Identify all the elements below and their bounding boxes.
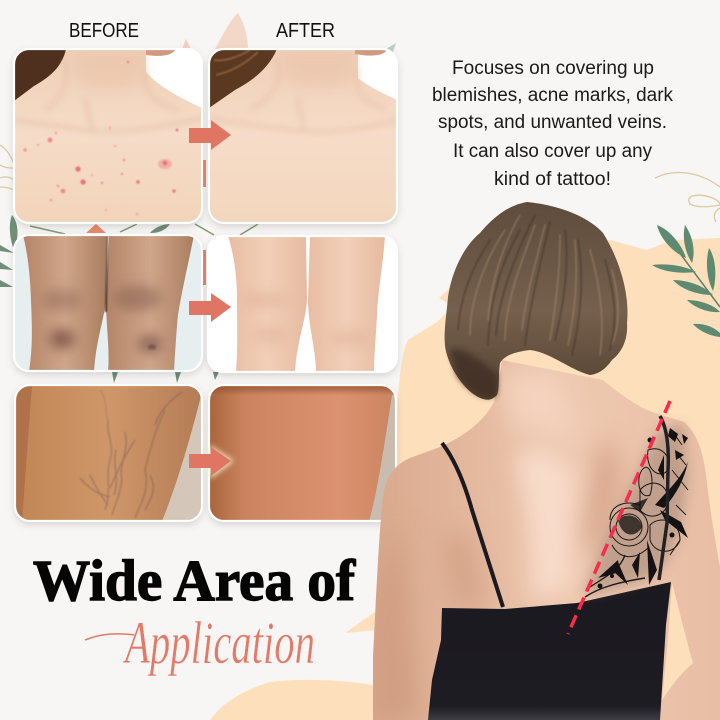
- neck and collarbone shading: [14, 60, 202, 132]
- title: Application script: [85, 610, 315, 676]
- body: [370, 340, 720, 720]
- panel: after, clear chest: [209, 49, 397, 223]
- acne spots: [23, 61, 178, 215]
- text block: description: It can also cover up any: [453, 141, 652, 162]
- arrow: row 1: [189, 120, 231, 150]
- title: Application script: Application: [122, 610, 315, 676]
- panel: after, clear knees: [208, 236, 397, 372]
- heading: after label: AFTER: [276, 20, 335, 42]
- panel: before, chest acne: [14, 49, 202, 223]
- heading: before label: BEFORE: [69, 20, 139, 42]
- dark knee patches: [42, 285, 162, 353]
- decorative leaves behind panels: [0, 13, 396, 383]
- gap between dress and right arm: [662, 583, 693, 700]
- text block: description: kind of tattoo!: [494, 169, 611, 190]
- panel: before, spider veins: [15, 385, 204, 521]
- left strap: [442, 443, 503, 607]
- title: Wide Area of: Wide Area of: [33, 548, 356, 613]
- arrow: row 3 with glow: [189, 447, 231, 476]
- green branch, top right: [652, 225, 720, 337]
- text block: description: blemishes, acne marks, dark: [432, 85, 673, 106]
- right leg: [106, 235, 194, 372]
- right strap: [659, 416, 668, 580]
- decorative gold outline leaves, top right: [655, 172, 720, 222]
- panel: after, smooth leg: [209, 383, 398, 521]
- arrow: row 2: [189, 293, 231, 322]
- text block: description: spots, and unwanted veins.: [438, 112, 667, 133]
- dress: [428, 582, 671, 720]
- text block: description: [432, 58, 673, 190]
- white background top right: [146, 49, 202, 108]
- peach background blob: [210, 238, 720, 720]
- hair: [14, 49, 66, 101]
- text block: description: Focuses on covering up: [452, 58, 654, 79]
- hair: [445, 202, 628, 400]
- red dashed line: [568, 401, 670, 634]
- chin shadow: [146, 50, 176, 56]
- tattoo: [583, 423, 688, 597]
- left leg: [23, 235, 107, 372]
- veins: [80, 390, 182, 518]
- woman's back with tattoo: [370, 202, 720, 720]
- panel: before, dark knees: [14, 235, 202, 372]
